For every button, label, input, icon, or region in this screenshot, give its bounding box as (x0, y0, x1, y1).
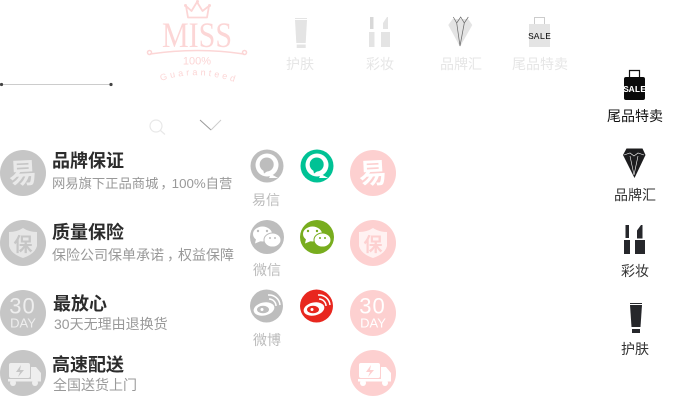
social: yixin grey (250, 150, 284, 208)
nav: faded sale bag (512, 18, 568, 72)
social: wechat grey (250, 220, 284, 278)
side label: 品牌汇 (614, 187, 656, 203)
nav label: 彩妆 (366, 56, 394, 72)
nav label: 品牌汇 (440, 56, 482, 72)
icon: pink 30 day: DAY (360, 316, 386, 330)
sale tag: SALE (623, 84, 646, 95)
nav label: 护肤 (286, 56, 314, 72)
icon: yi circle: 易 (8, 157, 38, 190)
icon: pink 30 day (350, 290, 396, 336)
icon: pink yi: 易 (358, 157, 388, 190)
heading: 品牌保证 (52, 151, 124, 171)
icon: pink 30 day: 30 (359, 294, 386, 318)
icon: 30 day circle: DAY (10, 316, 36, 330)
social: wechat colour (300, 220, 334, 254)
nav: faded makeup (366, 17, 394, 72)
subtitle: 网易旗下正品商城，100%自营 (52, 176, 232, 191)
heading: 高速配送 (52, 354, 124, 375)
logo wordmark: MISS (162, 15, 232, 55)
icon: yi circle (0, 150, 46, 196)
nav: faded diamond (440, 17, 482, 72)
icon: crown (184, 0, 211, 18)
label: 易信 (252, 192, 280, 208)
side nav: sale bag (607, 70, 663, 124)
icon: 30 day circle: 30 (9, 294, 36, 318)
social: yixin colour (300, 150, 334, 182)
icon: pink yi (350, 150, 396, 196)
icon: pink shield: 保 (363, 234, 383, 256)
side nav: tube (621, 303, 649, 357)
subtitle: 30天无理由退换货 (54, 316, 168, 332)
icon: 30 day circle (0, 290, 46, 336)
label: 微信 (253, 262, 281, 278)
side nav: makeup (621, 225, 649, 279)
feature: fast delivery (0, 350, 137, 396)
icon: pink truck (350, 350, 396, 396)
feature: peace of mind (0, 290, 168, 336)
subtitle: 保险公司保单承诺，权益保障 (52, 247, 234, 263)
logo flourish (148, 50, 246, 54)
feature: quality insurance (0, 220, 234, 266)
icon: search (150, 120, 165, 134)
heading: 最放心 (53, 294, 107, 314)
icon: shield circle: 保 (13, 234, 33, 256)
social: weibo colour (300, 290, 333, 322)
side label: 尾品特卖 (607, 108, 663, 124)
feature: brand guarantee (0, 150, 232, 196)
icon: chevron (200, 120, 221, 130)
nav: faded tube (286, 18, 314, 72)
subtitle: 全国送货上门 (53, 377, 137, 393)
social: weibo grey (250, 290, 283, 348)
side label: 护肤 (621, 341, 649, 357)
logo percent: 100% (183, 56, 211, 68)
icon: shield circle (0, 220, 46, 266)
icon: pink shield (350, 220, 396, 266)
logo: MISS 100% Guaranteed (146, 0, 248, 82)
nav label: 尾品特卖 (512, 56, 568, 72)
side label: 彩妆 (621, 263, 649, 279)
side nav: diamond (614, 148, 656, 203)
slider line with end dots (0, 83, 113, 86)
heading: 质量保险 (52, 222, 124, 242)
sale tag: SALE (528, 31, 551, 42)
icon: truck circle (0, 350, 46, 396)
logo tagline: Guaranteed (160, 70, 236, 82)
label: 微博 (253, 332, 281, 348)
